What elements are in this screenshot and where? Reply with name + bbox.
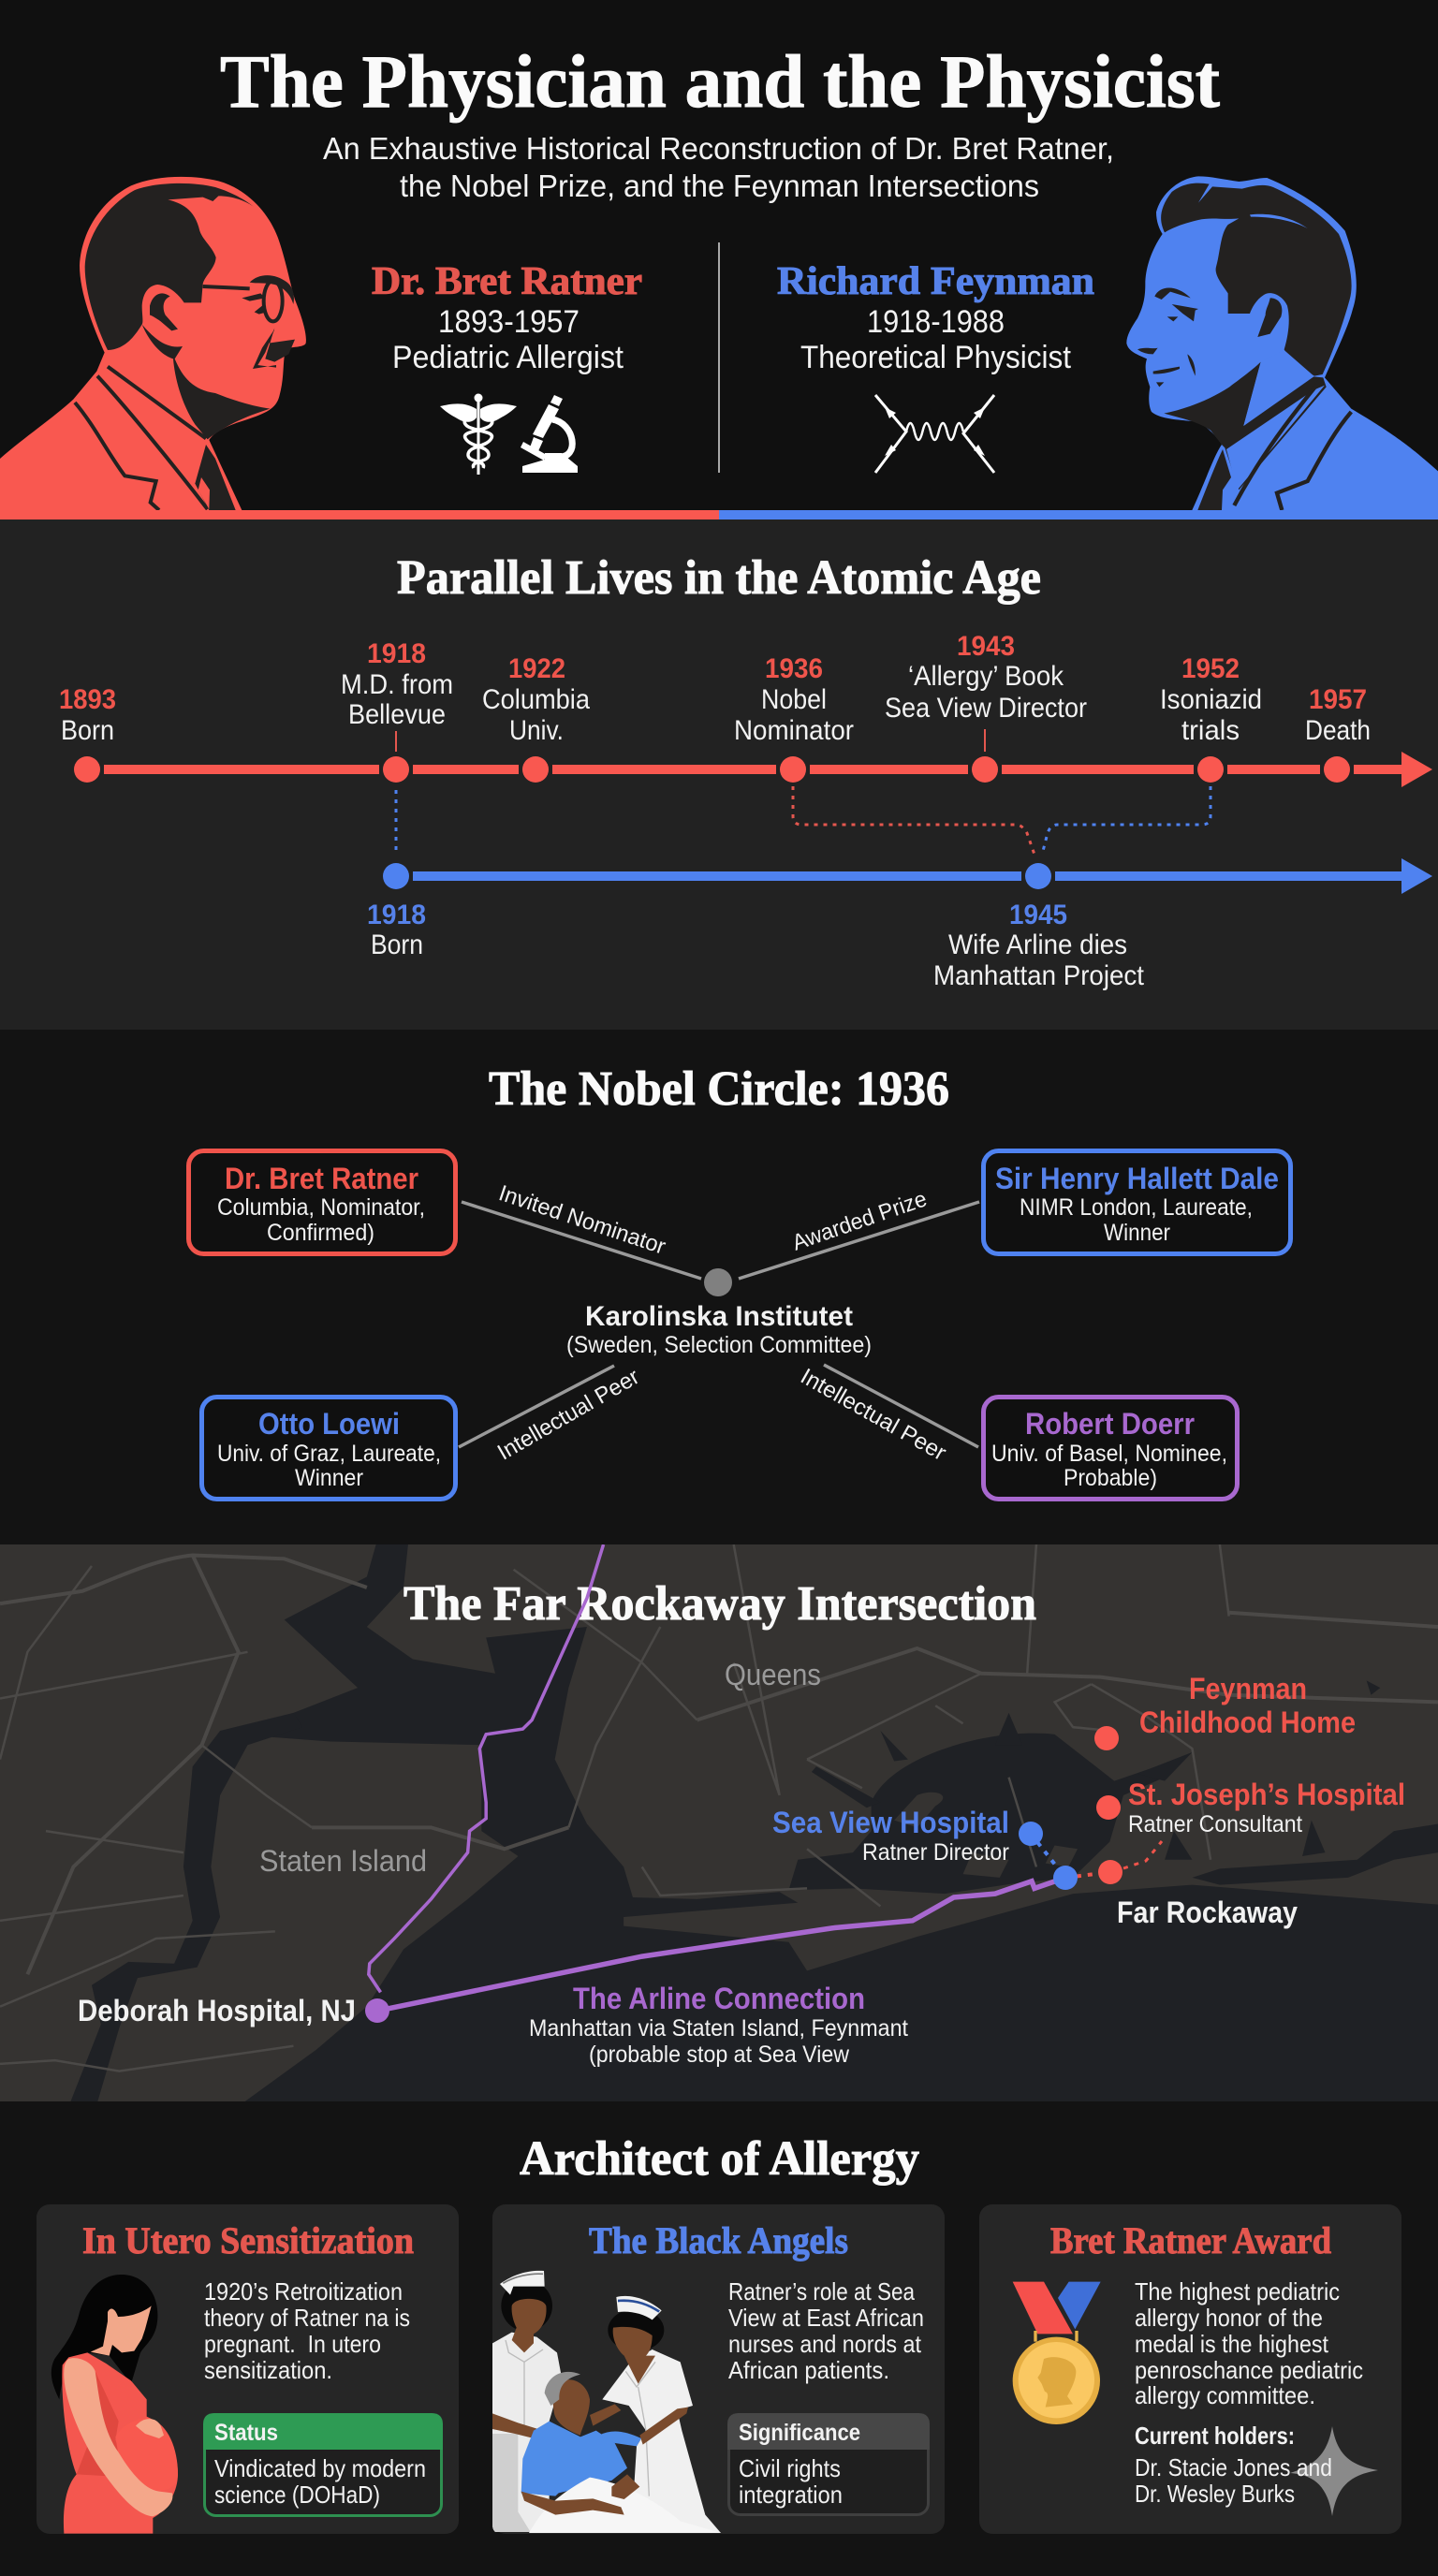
box: Robert Doerr: Probable)	[1064, 1465, 1157, 1491]
event: 1893: 1893	[59, 684, 116, 715]
event: 1918: 1918	[367, 638, 426, 669]
event: 1943: ‘Allergy’ Book	[908, 661, 1064, 692]
illustration: medal	[1013, 2282, 1101, 2424]
status box: Status	[214, 2420, 278, 2446]
label: Sea View: Sea View Hospital	[772, 1806, 1009, 1839]
illustration: nurses and patient	[492, 2271, 721, 2533]
card: In Utero Sensitization	[37, 2204, 459, 2534]
name block: Ratner: Pediatric Allergist	[392, 340, 624, 375]
label: Arline connection: The Arline Connection	[573, 1982, 865, 2015]
name block: Ratner: 1893-1957	[438, 304, 580, 340]
illustration: pregnant woman	[51, 2275, 178, 2534]
label: Arline connection: (probable stop at Sea View	[589, 2042, 850, 2068]
portrait: Dr. Bret Ratner	[0, 177, 318, 520]
card heading: Bret Ratner Award	[1050, 2219, 1331, 2261]
label: Sea View: Ratner Director	[862, 1839, 1009, 1866]
name block: Feynman	[777, 260, 1094, 375]
label: St. Joseph's: Ratner Consultant	[1128, 1811, 1302, 1837]
heading: The Far Rockaway Intersection	[404, 1577, 1036, 1631]
event: 1952: Isoniazid	[1160, 684, 1262, 715]
box: Bret Ratner: Dr. Bret Ratner	[225, 1162, 418, 1195]
label: Staten Island: Staten Island	[259, 1844, 427, 1878]
subtitle	[323, 131, 1114, 203]
body text: 1920’s Retroitization	[204, 2277, 403, 2305]
event: 1952: trials	[1181, 715, 1240, 746]
box: Otto Loewi: Otto Loewi	[258, 1407, 400, 1441]
label: St. Joseph's: St. Joseph’s Hospital	[1128, 1778, 1405, 1811]
event: 1893	[59, 684, 116, 746]
label: Awarded Prize: Awarded Prize	[789, 1186, 930, 1256]
event: 1943	[885, 631, 1087, 724]
label: Feynman home: Childhood Home	[1139, 1705, 1356, 1739]
body text	[1135, 2277, 1363, 2409]
event: 1918: M.D. from	[341, 669, 453, 700]
event: 1936: 1936	[765, 653, 823, 684]
box: Henry Dale: Sir Henry Hallett Dale	[995, 1162, 1279, 1195]
event: 1936: Nobel	[761, 684, 827, 715]
label: Feynman home: Feynman	[1189, 1672, 1307, 1705]
marker: Far Rockaway blue	[1053, 1866, 1078, 1890]
label: Arline connection: Manhattan via Staten Island, Feynmant	[529, 2015, 908, 2042]
marker: Sea View	[1019, 1822, 1043, 1846]
label: Far Rockaway: Far Rockaway	[1117, 1895, 1298, 1929]
box: Otto Loewi: Univ. of Graz, Laureate,	[217, 1441, 441, 1467]
event: 1952: 1952	[1181, 653, 1240, 684]
box: Bret Ratner: Confirmed)	[267, 1220, 374, 1246]
status box	[203, 2413, 443, 2516]
heading: The Nobel Circle: 1936	[489, 1062, 949, 1116]
event: 1957: 1957	[1309, 684, 1367, 715]
current holders	[1135, 2422, 1332, 2508]
decorative sparkle icon	[1290, 2426, 1378, 2516]
body text	[204, 2277, 410, 2384]
event: 1957	[1305, 684, 1371, 746]
body text: allergy committee.	[1135, 2381, 1315, 2409]
body text: allergy honor of the	[1135, 2304, 1323, 2332]
name block: Feynman: 1918-1988	[867, 304, 1005, 340]
event: 1918: Bellevue	[348, 699, 446, 730]
portrait: Richard Feynman	[1105, 176, 1438, 520]
marker: Feynman home	[1094, 1726, 1119, 1750]
event: 1922: 1922	[508, 653, 565, 684]
subtitle: the Nobel Prize, and the Feynman Intersections	[400, 168, 1039, 203]
body text	[728, 2277, 924, 2384]
box: Robert Doerr	[983, 1397, 1238, 1500]
icon: caduceus	[440, 393, 517, 475]
event: Feynman 1918: 1918	[367, 900, 426, 930]
label: Deborah: Deborah Hospital, NJ	[78, 1994, 356, 2027]
box: Henry Dale: NIMR London, Laureate,	[1020, 1194, 1253, 1221]
label: Queens: Queens	[725, 1658, 821, 1691]
event: 1918	[341, 638, 453, 730]
heading: Architect of Allergy	[520, 2132, 919, 2186]
icon: microscope	[521, 395, 578, 473]
timeline: Ratner line	[74, 729, 1432, 787]
box: Robert Doerr: Robert Doerr	[1025, 1407, 1195, 1441]
panel: Far Rockaway map	[0, 1544, 1438, 2106]
event: 1922: Columbia	[482, 684, 590, 715]
label: Arline connection	[529, 1982, 908, 2068]
route: Arline connection	[369, 1544, 1065, 2011]
label: Intellectual Peer left: Intellectual Peer	[493, 1364, 644, 1466]
significance box: Significance	[739, 2420, 860, 2446]
event: 1922: Univ.	[509, 715, 564, 746]
event: 1922	[482, 653, 590, 746]
box: Otto Loewi	[202, 1397, 455, 1500]
body text: nurses and nords at	[728, 2330, 922, 2358]
accent bar	[0, 510, 1438, 520]
divider	[718, 242, 720, 473]
name block: Feynman: Theoretical Physicist	[800, 340, 1072, 375]
event: 1936	[734, 653, 854, 746]
box: Henry Dale	[983, 1151, 1290, 1254]
box: Otto Loewi: Winner	[295, 1465, 363, 1491]
event: Feynman 1945: Wife Arline dies	[948, 929, 1127, 960]
panel: parallel lives timeline	[0, 520, 1438, 1030]
marker: St. Joseph's	[1096, 1795, 1121, 1820]
significance box	[727, 2413, 930, 2514]
event: 1936: Nominator	[734, 715, 854, 746]
status box: science (DOHaD)	[214, 2481, 380, 2509]
box: Henry Dale: Winner	[1104, 1220, 1170, 1246]
panel: header	[0, 0, 1438, 520]
card: The Black Angels	[492, 2204, 945, 2534]
event: 1943: 1943	[957, 631, 1015, 662]
body text: penroschance pediatric	[1135, 2356, 1363, 2384]
box: Robert Doerr: Univ. of Basel, Nominee,	[991, 1441, 1227, 1467]
significance box: Civil rights	[739, 2454, 841, 2482]
event: 1957: Death	[1305, 715, 1371, 746]
title: The Physician and the Physicist	[220, 41, 1220, 124]
event: 1943: Sea View Director	[885, 693, 1087, 724]
event: Feynman 1945: Manhattan Project	[933, 960, 1145, 991]
name block: Feynman: Richard Feynman	[777, 260, 1094, 303]
current holders: Current holders:	[1135, 2422, 1295, 2450]
map: water and roads	[0, 1544, 1438, 2106]
name block: Ratner: Dr. Bret Ratner	[372, 260, 642, 303]
event: 1952	[1160, 653, 1262, 746]
body text: sensitization.	[204, 2356, 332, 2384]
timeline: Feynman line	[383, 858, 1432, 894]
node: Karolinska: Karolinska Institutet	[585, 1301, 853, 1332]
box: Bret Ratner: Columbia, Nominator,	[217, 1194, 425, 1221]
body text: medal is the highest	[1135, 2330, 1329, 2358]
body text: pregnant. In utero	[204, 2330, 381, 2358]
subtitle: An Exhaustive Historical Reconstruction of Dr. Bret Ratner,	[323, 131, 1114, 166]
body text: View at East African	[728, 2304, 924, 2332]
significance box: integration	[739, 2481, 843, 2509]
event: Feynman 1918	[367, 900, 426, 960]
panel: Architect of Allergy	[37, 2140, 1401, 2534]
current holders: Dr. Wesley Burks	[1135, 2480, 1295, 2508]
node: Karolinska	[566, 1268, 872, 1358]
body text: Ratner’s role at Sea	[728, 2277, 915, 2305]
label: Feynman home	[1140, 1677, 1356, 1734]
panel: Nobel circle	[0, 1030, 1438, 1546]
marker: Deborah	[365, 1998, 389, 2023]
dotted links	[1036, 1840, 1163, 1878]
status box: Vindicated by modern	[214, 2454, 426, 2482]
body text: African patients.	[728, 2356, 889, 2384]
event: Feynman 1945	[933, 900, 1145, 991]
marker: Far Rockaway red	[1098, 1860, 1123, 1884]
label: Intellectual Peer right: Intellectual Peer	[796, 1364, 950, 1466]
card: Bret Ratner Award	[979, 2204, 1401, 2534]
event: Feynman 1945: 1945	[1009, 900, 1067, 930]
body text: theory of Ratner na is	[204, 2304, 410, 2332]
label: St. Joseph's	[1129, 1782, 1403, 1832]
card heading: In Utero Sensitization	[82, 2219, 414, 2261]
label: Sea View	[773, 1810, 1009, 1860]
box: Bret Ratner	[189, 1151, 455, 1254]
name block: Ratner	[372, 260, 642, 375]
connectors	[396, 786, 1211, 855]
card heading: The Black Angels	[589, 2219, 848, 2261]
heading: Parallel Lives in the Atomic Age	[397, 551, 1041, 605]
body text: The highest pediatric	[1135, 2277, 1340, 2305]
event: Feynman 1918: Born	[371, 929, 423, 960]
connector lines	[459, 1202, 979, 1447]
icon: Feynman diagram	[875, 395, 994, 473]
current holders: Dr. Stacie Jones and	[1135, 2453, 1332, 2481]
node: Karolinska: (Sweden, Selection Committee)	[566, 1332, 872, 1358]
label: Invited Nominator: Invited Nominator	[495, 1180, 668, 1260]
event: 1893: Born	[61, 715, 114, 746]
